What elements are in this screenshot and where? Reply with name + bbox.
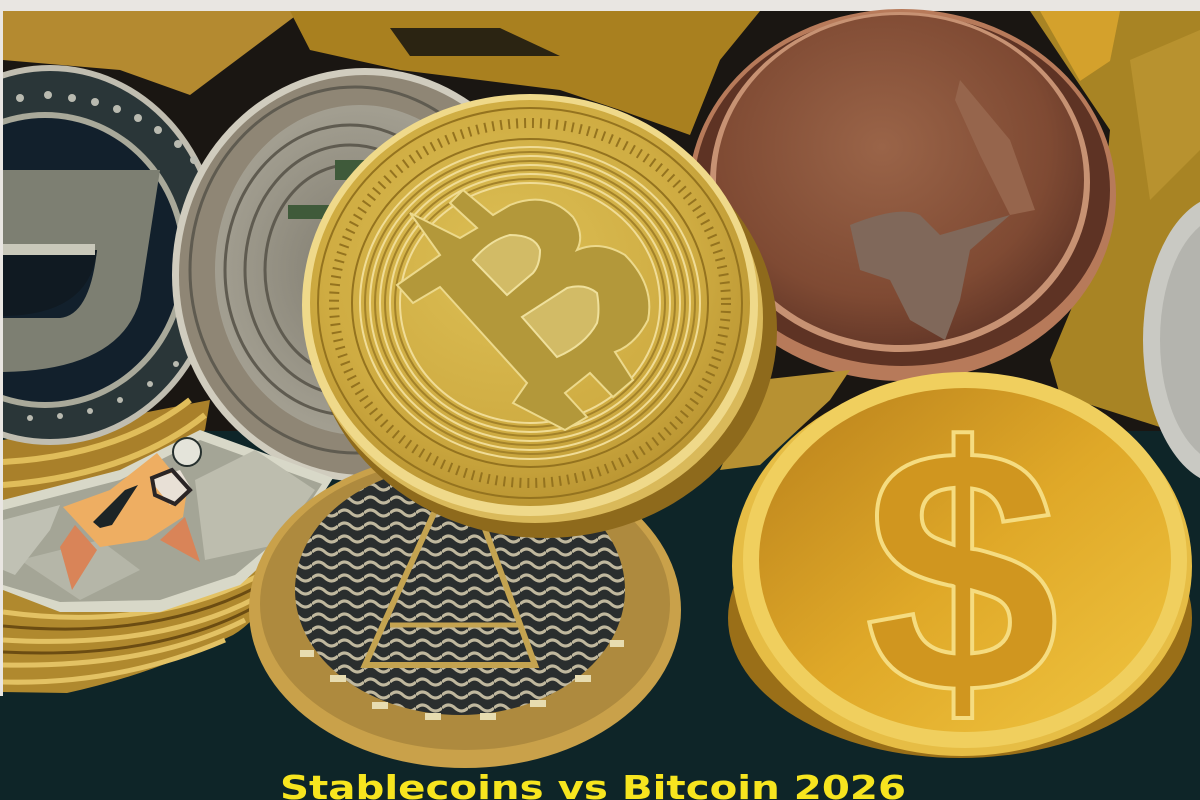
coin: copper XRP xyxy=(688,9,1116,381)
coin: silver at right edge xyxy=(1143,195,1200,485)
icon: Bitcoin symbol xyxy=(397,190,649,430)
coin: Ethereum wave coin xyxy=(249,452,681,768)
coin: Bitcoin gold coin xyxy=(302,94,777,538)
coin: dark Dash coin with stack xyxy=(0,65,222,505)
coin: silver with circuit pattern xyxy=(172,68,558,482)
coin: gold coin behind Bitcoin xyxy=(720,370,850,470)
icon: orange dog mascot xyxy=(60,438,201,590)
left white edge xyxy=(0,11,3,696)
gold coin stack at bottom left xyxy=(3,535,300,693)
coin: gold dollar coin xyxy=(728,372,1192,767)
icon: dollar sign: $ xyxy=(865,376,1059,767)
coin: silver Shiba coin xyxy=(3,430,333,612)
